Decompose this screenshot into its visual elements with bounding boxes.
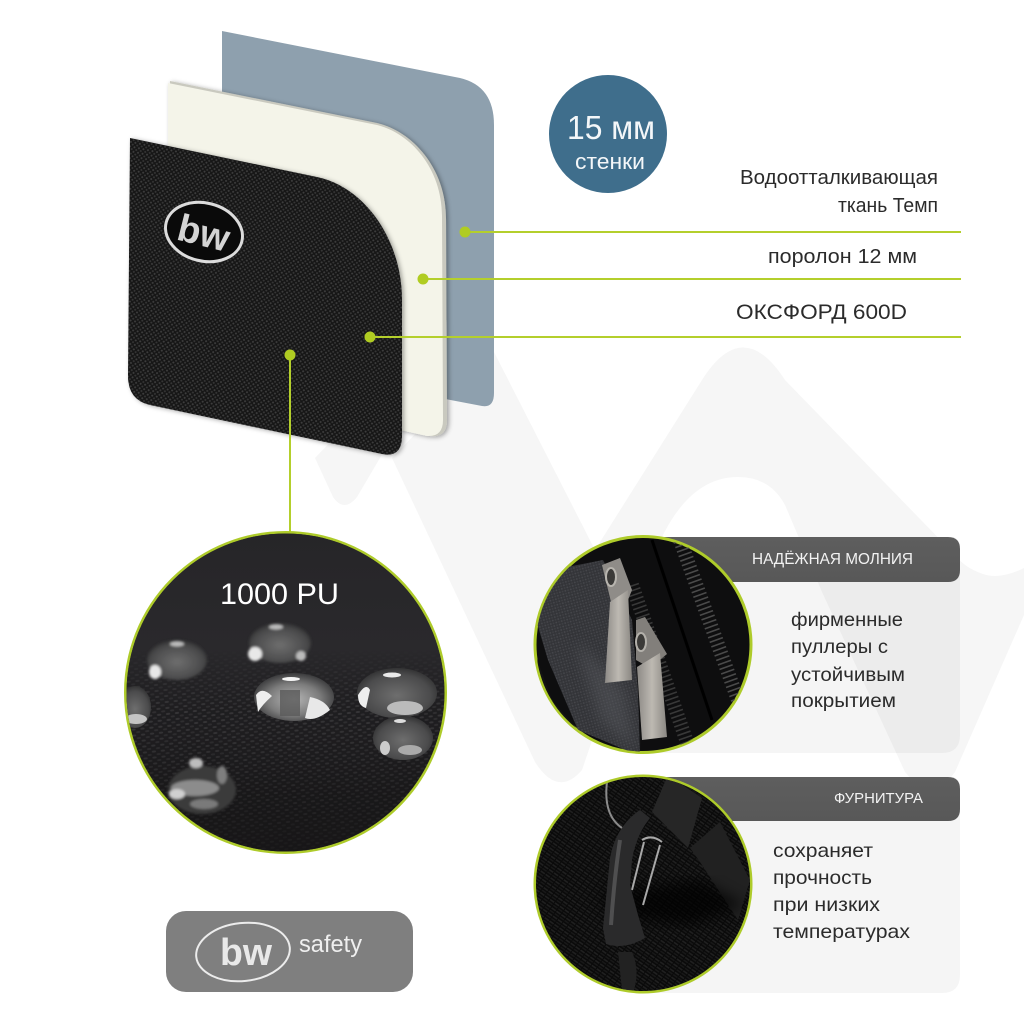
description: фирменные [791,609,903,631]
background watermark [315,348,1024,788]
icon: brand logo on fabric: bw [173,207,234,261]
photo circle: water drops on 1000 PU fabric [119,530,450,860]
safety badge: safety [299,931,362,958]
icon: brand logo on fabric [159,194,249,270]
panel: hardware [530,770,960,1000]
leader line: down to PU circle [284,350,296,534]
description [773,840,910,943]
heading bar [643,777,960,821]
layer: blue water-repellent fabric [222,31,494,406]
description: сохраняет [773,840,873,862]
puller 2 [636,617,667,740]
heading: НАДЁЖНАЯ МОЛНИЯ [752,551,913,568]
caption: 1000 PU [220,578,339,611]
leader line: Oxford [364,332,961,342]
safety badge [166,911,413,992]
description: пуллеры с [791,636,888,658]
drop [254,673,334,721]
drop [357,668,437,718]
wall thickness badge: 15 мм [567,109,655,146]
drop [168,758,236,814]
description [791,609,905,712]
drop [126,686,151,728]
layer: black Oxford fabric [128,138,402,455]
icon: safety logo: bw [220,932,272,974]
hook [603,810,650,946]
leader line: foam [418,274,961,284]
drop [373,716,433,760]
description: при низких [773,894,880,916]
grey fabric [530,560,640,756]
photo circle: plastic clasp [530,770,755,1000]
heading: ФУРНИТУРА [834,790,923,807]
panel: zipper [530,536,960,756]
label: water-repellent fabric: ткань Темп [838,195,938,217]
label: water-repellent fabric: Водоотталкивающая [740,167,938,189]
photo circle: zipper pullers [530,536,751,756]
description: устойчивым [791,664,905,686]
description: температурах [773,921,910,943]
description: прочность [773,867,872,889]
layered material sample [128,31,494,455]
leader line: fabric [460,226,961,238]
puller 1 [602,558,632,683]
strap [652,775,702,848]
label: Oxford: ОКСФОРД 600D [736,301,907,324]
zipper teeth [680,540,738,700]
icon: safety logo [193,918,293,986]
label: foam: поролон 12 мм [768,246,917,268]
description: покрытием [791,690,896,712]
drop [147,623,311,680]
layer: cream foam [168,81,447,436]
wire ring [606,782,622,828]
silver gate [632,837,662,905]
wall thickness badge [549,75,667,193]
label: water-repellent fabric [740,167,938,217]
heading bar [643,537,960,582]
wall thickness badge: стенки [575,149,645,174]
